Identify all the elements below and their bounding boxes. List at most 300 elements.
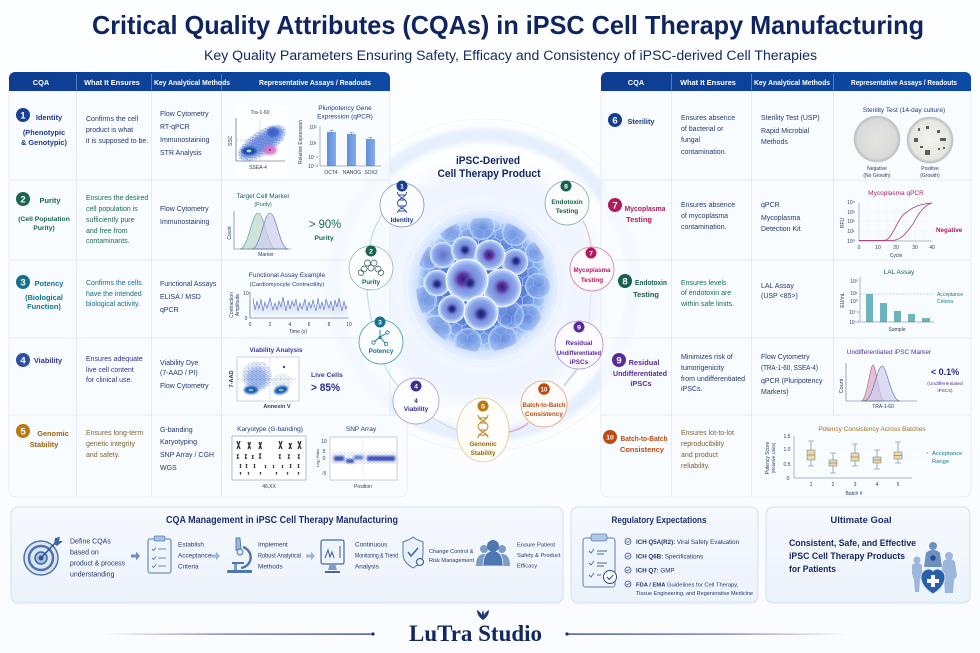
- table header: CQA: [33, 78, 50, 87]
- row 1: Identity: Confirms the cell: [86, 116, 139, 123]
- row 4: Viability: Viability: [34, 356, 63, 365]
- node 5: Genomic Stability: Stability: [471, 450, 496, 457]
- step: change control: Risk Management: [429, 558, 475, 564]
- row 7: Mycoplasma Testing: Testing: [626, 215, 652, 224]
- row 2: Purity: [16, 192, 341, 258]
- chart: pluripotency bar chart: SOX2: [364, 170, 378, 176]
- chart: mycoplasma qPCR: Negative: [936, 227, 963, 234]
- row 1: Identity: (Phenotypic: [23, 128, 65, 137]
- row 3: Potency: 3: [20, 278, 26, 288]
- row 3: Potency: Function): [27, 302, 61, 311]
- chart: potency box plot: 1: [810, 482, 813, 488]
- row 5: Genomic Stability: and safety.: [86, 452, 120, 459]
- row 9: Residual Undifferentiated iPSCs: 9: [616, 356, 622, 366]
- icon: microscope: [227, 538, 252, 573]
- list: guidelines: ICH Q6B: Specifications: [636, 554, 703, 560]
- row 2: Purity: sufficiently pure: [86, 217, 135, 224]
- step: ensure patient safety: Ensure Patient: [517, 542, 555, 548]
- chart: pluripotency bar chart: 10³: [309, 125, 317, 131]
- row 9: Residual Undifferentiated iPSCs: Residual: [629, 358, 659, 367]
- chart: contractility trace: 10: [243, 291, 249, 297]
- chart: pluripotency bar chart: 10⁻³: [308, 164, 318, 170]
- node 3: Potency: 3: [378, 320, 382, 326]
- row 10: Batch-to-Batch Consistency: reliability.: [681, 463, 710, 470]
- row 7: Mycoplasma Testing: qPCR: [761, 202, 780, 209]
- chart: pluripotency bar chart: [298, 105, 381, 176]
- table header: Key Analytical Methods: [754, 78, 830, 87]
- chart: potency box plot: 4: [876, 482, 879, 488]
- readout: live cells: [311, 372, 343, 394]
- row 8: Endotoxin Testing: [618, 269, 963, 333]
- chart: contractility trace: 8: [328, 322, 331, 328]
- footer logo: LuTra Studio: [409, 609, 542, 646]
- chart: karyotype: [232, 426, 306, 490]
- chart: contractility trace: 2: [269, 322, 272, 328]
- row 10: Batch-to-Batch Consistency: reproducibility: [681, 441, 725, 448]
- table header: CQA: [628, 78, 645, 87]
- panel: right CQA table: [601, 72, 971, 497]
- row 9: Residual Undifferentiated iPSCs: [612, 349, 963, 410]
- chart: pluripotency bar chart: 10¹: [309, 141, 317, 147]
- row 4: Viability: for clinical use.: [86, 377, 132, 384]
- chart: pluripotency bar chart: 10⁻¹: [308, 155, 318, 161]
- row 6: Sterility: 6: [612, 116, 618, 126]
- node 4: Viability: 4: [414, 384, 418, 390]
- table header: Representative Assays / Readouts: [259, 78, 371, 87]
- chart: karyotype: 46,XX: [262, 484, 276, 490]
- icon: regulatory clipboard: [583, 534, 616, 587]
- chart: mycoplasma qPCR: RFU: [840, 217, 846, 228]
- chart: mycoplasma qPCR: 10⁰: [847, 239, 855, 245]
- step: establish acceptance criteria: [178, 542, 212, 570]
- node 4: Viability: 4: [414, 398, 418, 405]
- chart: viability scatter: Annexin V: [263, 404, 291, 410]
- chart: potency box plot: 0: [787, 476, 790, 482]
- chart: potency box plot: Potency Consistency Across Batches: [818, 426, 926, 433]
- chart: undifferentiated marker histogram: < 0.1%: [931, 367, 959, 377]
- row 9: Residual Undifferentiated iPSCs: Markers): [761, 389, 789, 396]
- readout: purity: > 90%: [309, 217, 341, 231]
- step: ensure patient safety: [517, 542, 561, 570]
- step: continuous monitoring: [355, 542, 398, 570]
- table header: Representative Assays / Readouts: [851, 78, 957, 87]
- chart: LAL assay: Sample: [889, 327, 906, 333]
- chart: viability scatter: [229, 347, 303, 410]
- row 1: Identity: 1: [20, 110, 26, 122]
- chart: potency box plot: 3: [854, 482, 857, 488]
- chart: contractility trace: 0: [245, 316, 248, 322]
- chart: undifferentiated marker histogram: Undifferentiated iPSC Marker: [847, 349, 932, 356]
- node 2: Purity: [349, 246, 393, 290]
- row 5: Genomic Stability: SNP Array / CGH: [160, 452, 214, 459]
- node 1: Identity: [380, 180, 424, 227]
- chart: contractility trace: Time (s): [289, 329, 307, 335]
- panel: regulatory expectations: [571, 507, 758, 603]
- row 2: Purity: Flow Cytometry: [160, 206, 209, 213]
- chart: Tra-1-60 flow plot: SSEA-4: [249, 165, 267, 171]
- chart: mycoplasma qPCR: 10¹: [847, 229, 855, 235]
- chart: undifferentiated marker histogram: [839, 349, 963, 410]
- node 9: Residual Undifferentiated iPSCs: Residual: [566, 340, 593, 347]
- row 5: Genomic Stability: [16, 424, 397, 490]
- chart: pluripotency bar chart: NANOG: [343, 170, 361, 176]
- chart: contractility trace: 4: [289, 322, 292, 328]
- row 9: Residual Undifferentiated iPSCs: Undifferentiated: [613, 369, 667, 378]
- row 5: Genomic Stability: 5: [20, 426, 26, 438]
- chart: pluripotency bar chart: OCT4: [324, 170, 338, 176]
- chart: purity histogram: Target Cell Marker: [236, 193, 290, 200]
- row 9: Residual Undifferentiated iPSCs: from undifferentiated: [681, 376, 745, 383]
- list: guidelines: Tissue Engineering, and Regenerative Medicine: [636, 591, 753, 597]
- node 3: Potency: [359, 316, 403, 364]
- row 3: Potency: (Biological: [25, 293, 63, 302]
- chart: contractility trace: 6: [308, 322, 311, 328]
- chart: SNP array: 10: [321, 439, 327, 445]
- row 8: Endotoxin Testing: (USP <85>): [761, 293, 798, 300]
- node 5: Genomic Stability: [457, 398, 509, 462]
- chart: contractility trace: Amplitude: [235, 294, 241, 316]
- row 2: Purity: Purity: [40, 196, 61, 205]
- chart: viability scatter: Viability Analysis: [249, 347, 303, 354]
- chart: potency box plot: 1.5: [784, 434, 791, 440]
- node 5: Genomic Stability: 5: [481, 404, 485, 410]
- readout: live cells: > 85%: [311, 382, 340, 394]
- table header: [9, 72, 390, 91]
- row 4: Viability: live cell content: [86, 367, 134, 374]
- row 7: Mycoplasma Testing: contamination.: [681, 224, 727, 231]
- row 1: Identity: Identity: [36, 113, 63, 122]
- node 5: Genomic Stability: Genomic: [469, 441, 497, 448]
- readout: purity: Purity: [314, 235, 334, 242]
- node 1: Identity: Identity: [391, 217, 414, 224]
- row 8: Endotoxin Testing: Endotoxin: [635, 278, 667, 287]
- row 7: Mycoplasma Testing: Mycoplasma: [761, 215, 800, 222]
- heading: iPSC-Derived Cell Therapy Product: Cell Therapy Product: [438, 168, 541, 180]
- icon: people: [476, 540, 510, 566]
- node 4: Viability: [393, 378, 439, 424]
- chart: SNP array: [315, 426, 397, 490]
- row 6: Sterility: Methods: [761, 139, 788, 146]
- step: implement methods: [258, 542, 301, 570]
- row 9: Residual Undifferentiated iPSCs: tumorigenicity: [681, 365, 725, 372]
- chart: contractility trace: [229, 272, 352, 335]
- row 9: Residual Undifferentiated iPSCs: iPSCs.: [681, 386, 702, 393]
- row 6: Sterility: of bacterial or: [681, 126, 724, 133]
- row 6: Sterility: Sterility: [627, 117, 655, 126]
- row 2: Purity: contaminants.: [86, 238, 130, 245]
- row 6: Sterility: [608, 107, 953, 179]
- row 1: Identity: RT-qPCR: [160, 124, 190, 131]
- heading: CQA Management in iPSC Cell Therapy Manufacturing: [166, 515, 398, 526]
- list: guidelines: ICH Q7: GMP: [636, 568, 675, 574]
- chart: contractility trace: 10: [346, 322, 352, 328]
- row 3: Potency: have the intended: [86, 291, 142, 298]
- chart: potency box plot: 5: [897, 482, 900, 488]
- chart: mycoplasma qPCR: 10³: [847, 210, 855, 216]
- step: define CQAs: Define CQAs: [70, 538, 111, 546]
- step: continuous monitoring: Analysis: [355, 564, 379, 570]
- panel: CQA management: [11, 507, 563, 603]
- icon: clipboard: [148, 536, 171, 573]
- row 4: Viability: (7-AAD / PI): [160, 370, 198, 377]
- chart: potency box plot: 2: [832, 482, 835, 488]
- row 9: Residual Undifferentiated iPSCs: qPCR (Pluripotency: [761, 378, 823, 385]
- chart: LAL assay: EU/mL: [840, 292, 846, 308]
- table header: Key Analytical Methods: [154, 78, 230, 87]
- row 1: Identity: [16, 105, 381, 178]
- chart: LAL assay: Acceptance: [937, 292, 963, 298]
- step: ensure patient safety: Efficacy: [517, 564, 537, 570]
- chart: mycoplasma qPCR: 10: [875, 245, 881, 251]
- node 7: Mycoplasma Testing: 7: [589, 250, 593, 258]
- row 6: Sterility: fungal: [681, 137, 701, 144]
- node 10: Batch-to-Batch Consistency: Consistency: [525, 411, 563, 418]
- row 3: Potency: [16, 272, 352, 335]
- row 10: Batch-to-Batch Consistency: and product: [681, 452, 718, 459]
- goal statement: Consistent, Safe, and Effective: [789, 538, 916, 548]
- row 8: Endotoxin Testing: Ensures levels: [681, 280, 727, 287]
- icon: target: [24, 537, 63, 575]
- step: establish acceptance criteria: Criteria: [178, 564, 199, 570]
- chart: contractility trace: Contraction: [229, 292, 235, 318]
- chart: mycoplasma qPCR: Mycoplasma qPCR: [868, 190, 924, 197]
- row 4: Viability: [16, 347, 343, 410]
- step: define CQAs: based on: [70, 550, 99, 556]
- row 1: Identity: product is what: [86, 127, 133, 134]
- row 3: Potency: biological activity.: [86, 301, 140, 308]
- row 8: Endotoxin Testing: of endotoxin are: [681, 290, 731, 297]
- chart: mycoplasma qPCR: 40: [929, 245, 935, 251]
- row 9: Residual Undifferentiated iPSCs: iPSCs: [630, 379, 652, 388]
- chart: undifferentiated marker histogram: Count: [839, 378, 845, 393]
- row 5: Genomic Stability: G-banding: [160, 427, 193, 434]
- step: implement methods: Methods: [258, 564, 283, 570]
- node 9: Residual Undifferentiated iPSCs: iPSCs: [570, 359, 589, 366]
- chart: SNP array: -5: [322, 471, 326, 477]
- node 3: Potency: Potency: [369, 348, 394, 355]
- row 1: Identity: Immunostaining: [160, 137, 210, 144]
- decorative halo behind centre: [318, 119, 650, 451]
- icon: DNA helix: [398, 192, 406, 213]
- readout: live cells: Live Cells: [311, 372, 343, 379]
- goal statement: [789, 538, 916, 574]
- node 8: Endotoxin Testing: [545, 180, 589, 225]
- chart: SNP array: SNP Array: [346, 426, 377, 433]
- row 7: Mycoplasma Testing: 7: [612, 200, 618, 212]
- node 4: Viability: Viability: [404, 406, 429, 413]
- chart: potency box plot: 0.5: [784, 462, 791, 468]
- row 1: Identity: STR Analysis: [160, 150, 202, 157]
- list: guidelines: [625, 538, 753, 597]
- chart: potency box plot: [765, 426, 962, 497]
- chart: mycoplasma qPCR: 30: [912, 245, 918, 251]
- row 2: Purity: 2: [20, 194, 26, 206]
- row 8: Endotoxin Testing: Testing: [633, 290, 659, 299]
- panel: ultimate goal: [766, 507, 970, 603]
- row 5: Genomic Stability: WGS: [160, 465, 177, 472]
- arrow: [306, 552, 315, 560]
- row 7: Mycoplasma Testing: [608, 190, 963, 259]
- row 6: Sterility: Ensures absence: [681, 115, 735, 122]
- chart: contractility trace: (Cardiomyocyte Contractility): [250, 282, 324, 288]
- row 9: Residual Undifferentiated iPSCs: Flow Cytometry: [761, 354, 810, 361]
- chart: undifferentiated marker histogram: iPSCs): [938, 388, 953, 394]
- chart: pluripotency bar chart: Pluripotency Gene: [318, 105, 372, 112]
- row 2: Purity: Purity): [33, 225, 55, 232]
- step: establish acceptance criteria: Establish: [178, 542, 204, 548]
- step: define CQAs: product & process: [70, 560, 125, 568]
- row 10: Batch-to-Batch Consistency: 10: [606, 434, 614, 442]
- row 4: Viability: Flow Cytometry: [160, 383, 209, 390]
- row 7: Mycoplasma Testing: Detection Kit: [761, 226, 801, 233]
- icon: monitor: [321, 540, 344, 573]
- readout: purity: [309, 217, 341, 242]
- row 9: Residual Undifferentiated iPSCs: Minimizes risk of: [681, 354, 733, 361]
- row 2: Purity: Immunostaining: [160, 219, 210, 226]
- step: implement methods: Implement: [258, 542, 288, 548]
- row 5: Genomic Stability: Stability: [30, 440, 59, 449]
- row 10: Batch-to-Batch Consistency: Ensures lot-to-lot: [681, 430, 734, 437]
- icon: cell cluster: [358, 260, 384, 275]
- row 7: Mycoplasma Testing: Ensures absence: [681, 202, 735, 209]
- arrow: [131, 552, 140, 560]
- chart: pluripotency bar chart: Relative Expression: [298, 120, 304, 164]
- chart: sterility culture dishes: (Growth): [920, 173, 940, 179]
- chart: SNP array: Log₂ Ratio: [315, 448, 320, 467]
- step: continuous monitoring: Monitoring & Trend: [355, 552, 398, 560]
- row 5: Genomic Stability: Genomic: [37, 429, 69, 438]
- node 10: Batch-to-Batch Consistency: [521, 381, 567, 427]
- step: define CQAs: [70, 538, 125, 578]
- chart: Tra-1-60 flow plot: [228, 105, 291, 178]
- row 1: Identity: it is supposed to be.: [86, 138, 148, 145]
- row 2: Purity: Ensures the desired: [86, 195, 148, 202]
- chart: viability scatter: 7-AAD: [229, 370, 235, 388]
- node 2: Purity: Purity: [362, 279, 380, 286]
- node 1: Identity: 1: [400, 184, 404, 190]
- row 5: Genomic Stability: Karyotyping: [160, 439, 197, 446]
- connector arcs between attributes: [367, 214, 591, 432]
- row 7: Mycoplasma Testing: of mycoplasma: [681, 213, 728, 220]
- footer line right: [565, 632, 847, 636]
- row 8: Endotoxin Testing: LAL Assay: [761, 283, 794, 290]
- row 3: Potency: ELISA / MSD: [160, 294, 201, 301]
- chart: Tra-1-60 flow plot: SSC: [228, 135, 234, 146]
- chart: SNP array: 5: [323, 449, 326, 455]
- row 7: Mycoplasma Testing: Mycoplasma: [624, 204, 666, 213]
- chart: LAL assay: 10⁻²: [849, 320, 859, 326]
- row 10: Batch-to-Batch Consistency: Batch-to-Batch: [620, 434, 668, 443]
- chart: sterility culture dishes: Positive: [921, 166, 939, 172]
- subtitle: Key Quality Parameters Ensuring Safety, Efficacy and Consistency of iPSC-derived Cell Therapies: [204, 48, 817, 63]
- chart: contractility trace: 0: [249, 322, 252, 328]
- row 8: Endotoxin Testing: 8: [622, 276, 628, 288]
- chart: sterility culture dishes: Negative: [867, 166, 887, 172]
- node 7: Mycoplasma Testing: Mycoplasma: [574, 267, 611, 274]
- panel: central product wheel: [349, 155, 614, 462]
- row 3: Potency: qPCR: [160, 307, 179, 314]
- row 2: Purity: (Cell Population: [18, 216, 70, 223]
- icon: patients with heart shield: [912, 542, 957, 594]
- node 9: Residual Undifferentiated iPSCs: [555, 321, 603, 369]
- chart: Tra-1-60 flow plot: Tra-1-60: [250, 110, 270, 116]
- row 2: Purity: cell population is: [86, 206, 138, 213]
- row 3: Potency: Potency: [35, 279, 64, 288]
- heading: Regulatory Expectations: [612, 515, 706, 526]
- row 5: Genomic Stability: genetic integrity: [86, 441, 136, 448]
- step: change control: [429, 549, 475, 564]
- chart: purity histogram: (Purity): [254, 202, 272, 208]
- table header: [601, 72, 971, 91]
- step: establish acceptance criteria: Acceptance: [178, 552, 212, 560]
- row 4: Viability: 4: [20, 356, 26, 366]
- goal statement: iPSC Cell Therapy Products: [789, 551, 905, 561]
- row 9: Residual Undifferentiated iPSCs: (TRA-1-60, SSEA-4): [761, 365, 818, 372]
- chart: SNP array: 0: [323, 456, 326, 462]
- chart: LAL assay: LAL Assay: [884, 269, 915, 276]
- row 6: Sterility: Rapid Microbial: [761, 128, 810, 135]
- node 9: Residual Undifferentiated iPSCs: Undifferentiated: [557, 350, 601, 357]
- chart: purity histogram: [227, 193, 291, 258]
- illustration: iPSC cell cluster: [407, 209, 559, 361]
- title: Critical Quality Attributes (CQAs) in iPSC Cell Therapy Manufacturing: [92, 10, 924, 40]
- step: continuous monitoring: Continuous: [355, 542, 387, 548]
- step: ensure patient safety: Safety & Product: [517, 553, 561, 559]
- row 3: Potency: Functional Assays: [160, 281, 217, 288]
- heading: iPSC-Derived Cell Therapy Product: [438, 155, 541, 180]
- node 10: Batch-to-Batch Consistency: 10: [541, 388, 548, 394]
- node 2: Purity: 2: [369, 248, 373, 256]
- node 9: Residual Undifferentiated iPSCs: 9: [577, 324, 581, 332]
- node 10: Batch-to-Batch Consistency: Batch-to-Batch: [522, 402, 566, 409]
- list: guidelines: FDA / EMA Guidelines for Cell Therapy,: [636, 582, 739, 588]
- icon: DNA helix amber: [478, 415, 488, 438]
- chart: mycoplasma qPCR: [840, 190, 963, 259]
- chart: potency box plot: 1.0: [784, 447, 791, 453]
- table header: What It Ensures: [680, 78, 736, 87]
- node 8: Endotoxin Testing: 8: [564, 184, 568, 190]
- chart: potency box plot: (Relative Units): [771, 442, 776, 473]
- row 4: Viability: Viability Dye: [160, 360, 198, 367]
- chart: mycoplasma qPCR: 10²: [847, 219, 855, 225]
- row 3: Potency: Confirms the cells: [86, 280, 142, 287]
- chart: sterility culture dishes: [854, 107, 953, 179]
- footer logo: LuTra Studio: LuTra Studio: [409, 621, 542, 646]
- node 7: Mycoplasma Testing: [570, 247, 614, 291]
- row 10: Batch-to-Batch Consistency: Consistency: [620, 445, 665, 454]
- chart: potency box plot: Batch #: [846, 491, 863, 497]
- chart: sterility culture dishes: Sterility Test (14-day culture): [863, 107, 945, 114]
- chart: mycoplasma qPCR: Cycle: [890, 253, 902, 259]
- node 8: Endotoxin Testing: Endotoxin: [551, 199, 583, 206]
- chart: SNP array: Position: [354, 484, 372, 490]
- chart: LAL assay: 10¹: [850, 291, 858, 297]
- chart: purity histogram: Marker: [258, 252, 274, 258]
- chart: potency box plot: Acceptance: [932, 451, 962, 457]
- row 6: Sterility: Sterility Test (USP): [761, 115, 820, 122]
- chart: LAL assay: [840, 269, 963, 333]
- chart: purity histogram: Count: [227, 226, 233, 240]
- chart: LAL assay: Criteria: [937, 299, 953, 305]
- arrow: [211, 552, 220, 560]
- row 4: Viability: Ensures adequate: [86, 356, 143, 363]
- table header: What It Ensures: [84, 78, 140, 87]
- icon: network: [374, 330, 387, 343]
- chart: sterility culture dishes: (No Growth): [863, 173, 891, 179]
- row 2: Purity: and free from: [86, 228, 128, 235]
- row 6: Sterility: contamination.: [681, 149, 727, 156]
- chart: LAL assay: 10⁻¹: [849, 310, 859, 316]
